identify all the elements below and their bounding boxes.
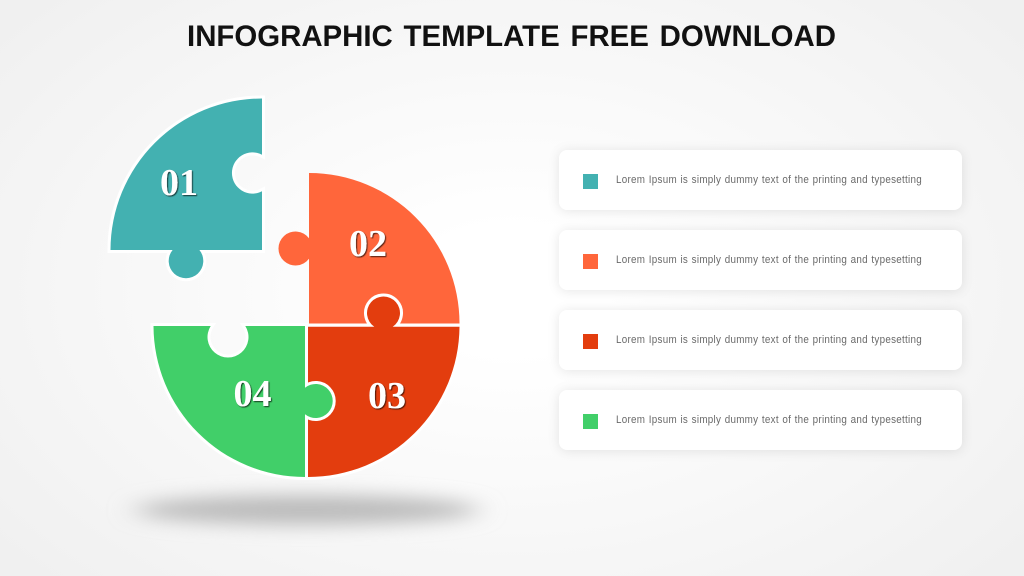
- number 03: 03: [368, 375, 406, 417]
- ground shadow: [135, 495, 479, 525]
- card 1: [559, 150, 962, 210]
- number 01: 01: [160, 162, 198, 204]
- number 02: 02: [349, 223, 387, 265]
- piece 01 teal: [110, 98, 262, 278]
- card 2: [559, 230, 962, 290]
- card 3 text: Lorem Ipsum is simply dummy text of the printing and typesetting: [616, 334, 922, 346]
- card 4: [559, 390, 962, 450]
- number 04: 04: [234, 373, 272, 415]
- card 1 text: Lorem Ipsum is simply dummy text of the printing and typesetting: [616, 174, 922, 186]
- card 4 text: Lorem Ipsum is simply dummy text of the printing and typesetting: [616, 414, 922, 426]
- piece 02 orange: [278, 173, 460, 324]
- swatch teal: [583, 174, 598, 189]
- swatch green: [583, 414, 598, 429]
- swatch orange: [583, 254, 598, 269]
- swatch red: [583, 334, 598, 349]
- card 3: [559, 310, 962, 370]
- piece 04 green: [154, 326, 333, 477]
- title: INFOGRAPHIC TEMPLATE FREE DOWNLOAD: [187, 20, 836, 53]
- card 2 text: Lorem Ipsum is simply dummy text of the printing and typesetting: [616, 254, 922, 266]
- piece 03 red: [308, 297, 460, 477]
